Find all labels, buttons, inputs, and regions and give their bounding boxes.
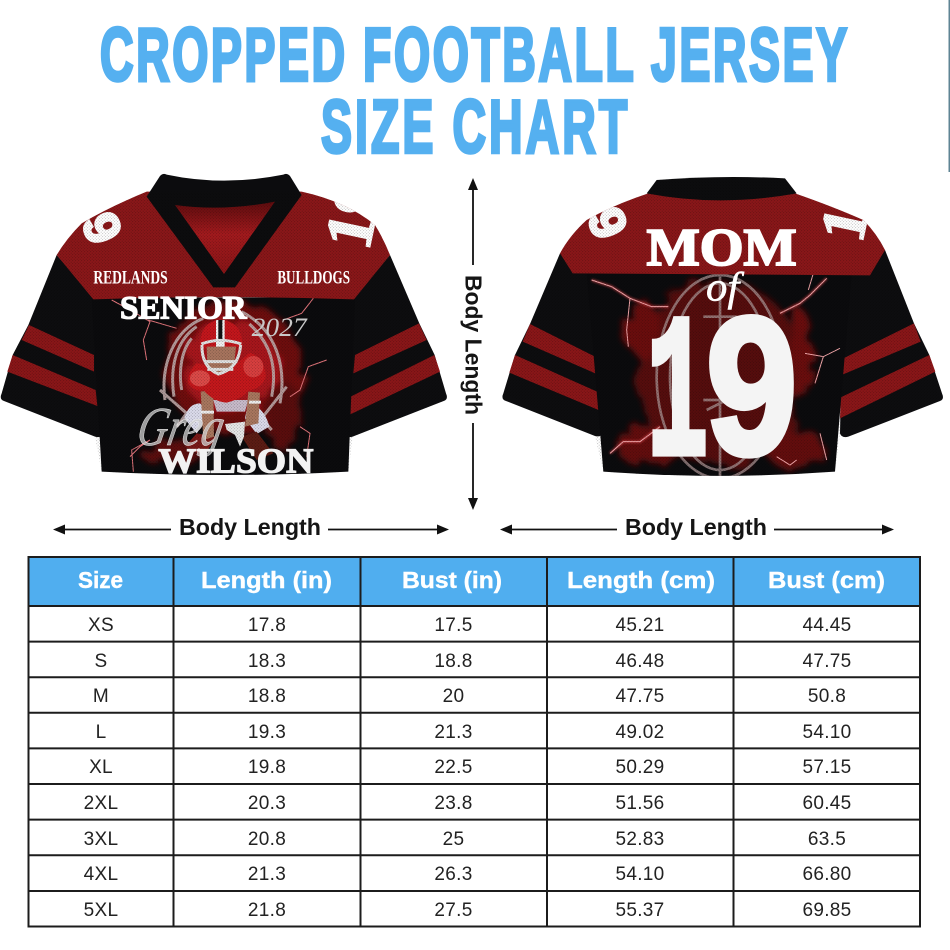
table rows: 4XL	[84, 864, 118, 885]
table rows: 17.8	[248, 615, 286, 636]
table rows: XL	[89, 757, 113, 778]
back artwork	[592, 273, 840, 478]
lightning	[592, 273, 840, 465]
front jersey	[1, 174, 447, 481]
arrow: vertical body length	[460, 178, 486, 510]
left sleeve	[502, 253, 603, 436]
back name: MOM	[647, 217, 797, 277]
table rows: 18.3	[248, 651, 286, 672]
table rows: 18.8	[434, 651, 473, 672]
yoke	[57, 192, 390, 299]
sleeve stripes	[509, 323, 935, 418]
table rows: 69.85	[802, 900, 852, 921]
table rows: 17.5	[434, 615, 473, 636]
table rows: 25	[443, 829, 464, 850]
table rows: 60.45	[802, 793, 852, 814]
table rows: 47.75	[802, 651, 852, 672]
table rows: 50.8	[808, 686, 846, 707]
table header: Length (in)	[201, 567, 332, 593]
table rows: 27.5	[434, 900, 473, 921]
table header	[28, 557, 920, 606]
table header: Bust (cm)	[768, 567, 885, 593]
table rows: 54.10	[615, 864, 665, 885]
glove	[225, 422, 245, 447]
front artwork	[112, 298, 327, 472]
table rows: 44.45	[802, 615, 852, 636]
table rows: 21.3	[434, 722, 473, 743]
table rows: 23.8	[434, 793, 473, 814]
senior: SENIOR	[120, 290, 247, 326]
table rows: 52.83	[615, 829, 665, 850]
table header: Size	[78, 567, 123, 593]
table rows	[84, 615, 852, 921]
table rows: 45.21	[615, 615, 665, 636]
table rows: 55.37	[615, 900, 665, 921]
table header: Bust (in)	[402, 567, 502, 593]
arms	[201, 390, 214, 440]
lightning	[112, 298, 327, 472]
red cloud	[617, 280, 823, 467]
table rows: 19.3	[248, 722, 286, 743]
table rows: 57.15	[802, 757, 852, 778]
shoulder numbers	[71, 174, 397, 255]
table rows: 22.5	[434, 757, 473, 778]
table rows: 26.3	[434, 864, 473, 885]
table rows: L	[96, 722, 106, 743]
edge line	[948, 0, 950, 172]
table rows: 51.56	[615, 793, 665, 814]
big number: 9	[703, 285, 801, 515]
arrow: vertical body length: Body Length	[460, 275, 486, 415]
mesh texture	[503, 177, 940, 476]
collar	[147, 174, 302, 287]
shoulder numbers: 19	[807, 170, 889, 247]
back jersey	[502, 177, 943, 476]
red cloud	[140, 300, 302, 465]
team name right: BULLDOGS	[277, 267, 350, 288]
table header: Length (cm)	[567, 567, 715, 593]
arrow: front body length	[53, 514, 449, 540]
facemask	[201, 340, 241, 374]
title	[100, 14, 847, 169]
title: CROPPED FOOTBALL JERSEY	[100, 14, 847, 97]
table rows: 2XL	[84, 793, 118, 814]
arrow: back body length	[500, 514, 894, 540]
of: of	[706, 265, 745, 311]
mesh texture	[2, 192, 444, 475]
year: 2027	[252, 313, 308, 342]
right sleeve	[840, 250, 943, 437]
neck inside	[175, 202, 275, 274]
arrow: front body length: Body Length	[179, 514, 321, 540]
table rows: 3XL	[84, 829, 118, 850]
shoulder pads	[188, 353, 266, 403]
table rows: S	[95, 651, 107, 672]
table rows: 20.3	[248, 793, 286, 814]
collar	[647, 177, 797, 200]
football wings	[160, 312, 287, 430]
table rows: 47.75	[615, 686, 665, 707]
first name: Greg	[132, 397, 230, 458]
sleeve stripes	[7, 323, 440, 415]
yoke	[560, 193, 885, 275]
table rows: 21.3	[248, 864, 286, 885]
table rows: 66.80	[802, 864, 852, 885]
table rows: 20.8	[248, 829, 286, 850]
lightning glow	[592, 278, 827, 453]
helmet	[200, 320, 242, 348]
shoulder numbers: 9	[576, 200, 639, 247]
team name left: REDLANDS	[93, 267, 168, 288]
table rows: 46.48	[615, 651, 665, 672]
table rows: 54.10	[802, 722, 852, 743]
shoulder numbers: 9	[71, 205, 133, 252]
shoulder numbers: 19	[312, 174, 397, 255]
table rows: 63.5	[808, 829, 846, 850]
table rows: 20	[443, 686, 464, 707]
football outline	[657, 275, 783, 478]
table rows: 50.29	[615, 757, 665, 778]
table rows: 49.02	[615, 722, 665, 743]
table rows: 19.8	[248, 757, 286, 778]
table rows: 21.8	[248, 900, 286, 921]
left sleeve	[1, 255, 104, 437]
size table	[28, 557, 920, 926]
title: SIZE CHART	[321, 86, 627, 169]
big number: 1	[647, 285, 708, 515]
face	[207, 347, 236, 375]
table rows: M	[93, 686, 109, 707]
table rows: 18.8	[248, 686, 286, 707]
legs	[184, 403, 211, 433]
table rows: 5XL	[84, 900, 118, 921]
player	[184, 320, 273, 460]
last name: WILSON	[158, 442, 313, 481]
body	[92, 297, 355, 475]
shoulder numbers	[576, 170, 889, 247]
arrow: back body length: Body Length	[625, 514, 767, 540]
right sleeve	[345, 255, 447, 437]
table rows: XS	[88, 615, 114, 636]
body	[587, 272, 852, 476]
